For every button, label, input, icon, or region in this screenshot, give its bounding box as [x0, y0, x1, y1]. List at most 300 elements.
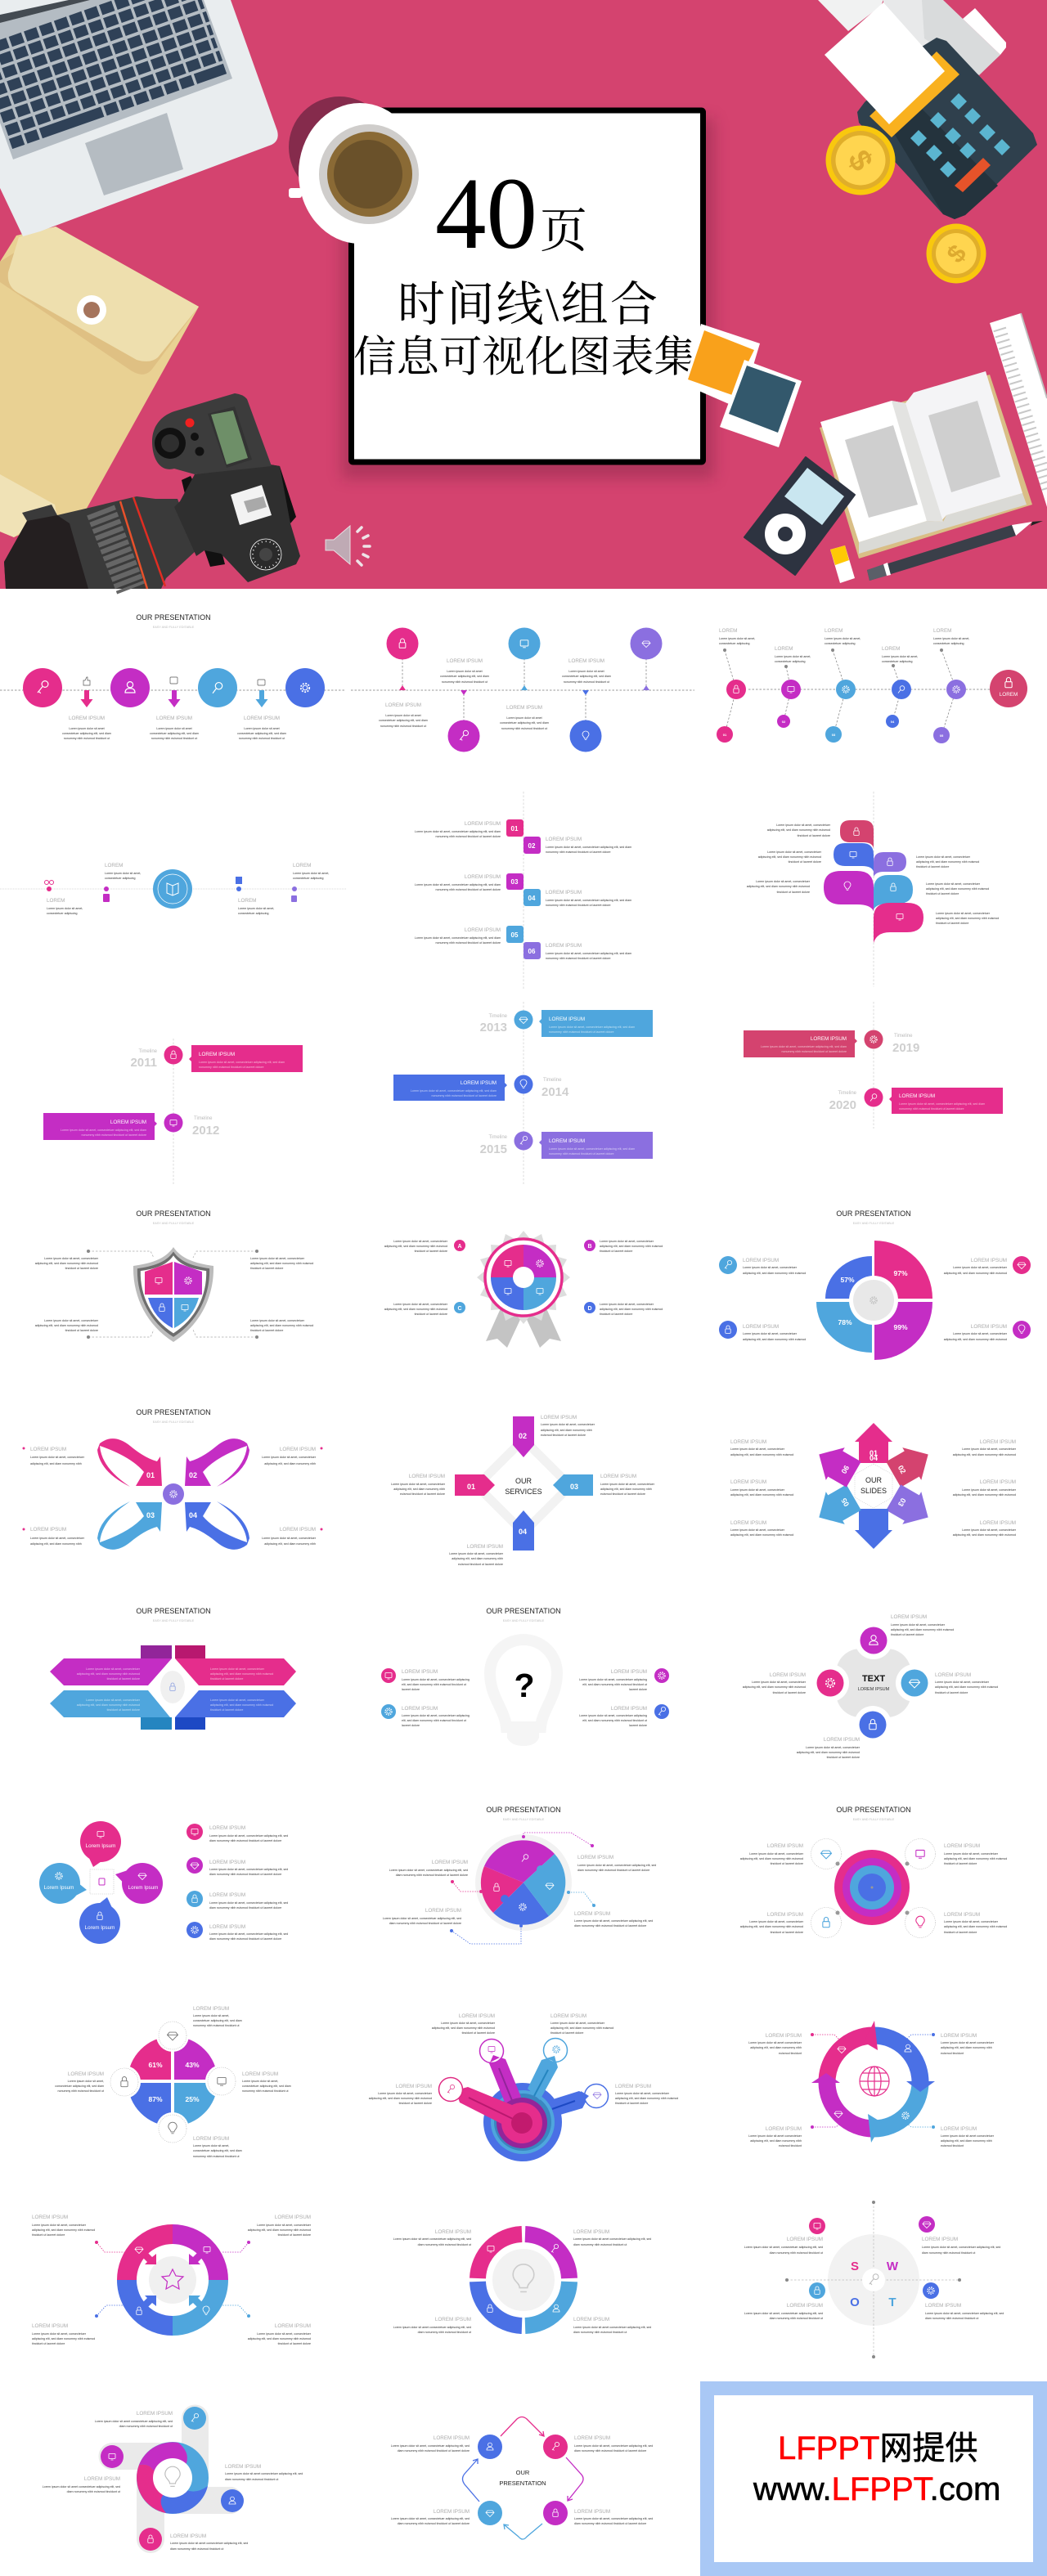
- text D: adipiscing elit, sed diam nonummy nibh euismod: [747, 885, 810, 888]
- text TR: Lorem ipsum dolor sit amet consectetuer adipiscing elit, sed: [573, 2237, 651, 2241]
- text A: adipiscing elit, sed diam nonummy nibh euismod: [384, 1245, 447, 1248]
- text BR: LOREM IPSUM: [574, 2509, 610, 2515]
- gold coins: $: [841, 145, 879, 177]
- text TR: LOREM IPSUM: [573, 2229, 609, 2235]
- slide: timeline 2013-2015: [393, 1002, 653, 1186]
- box 2012: LOREM IPSUM: [110, 1120, 146, 1125]
- petal 01: [97, 1438, 162, 1487]
- text 5: LOREM: [933, 628, 951, 634]
- text blue: adipiscing elit, sed diam nonummy nibh euismod: [615, 2097, 678, 2100]
- text left 1: LOREM IPSUM: [402, 1669, 438, 1675]
- text left top: diam nonummy nibh euismod tincidunt ut laoreet dolore: [396, 1874, 468, 1877]
- small icons: [44, 877, 297, 902]
- bubble purple: Lorem Ipsum: [128, 1885, 158, 1891]
- tabs: D: [587, 1306, 592, 1312]
- text 4: consectetuer adipiscing: [238, 912, 269, 915]
- text 2: Lorem ipsum dolor sit amet: [156, 727, 192, 730]
- text BR: LOREM IPSUM: [944, 1912, 980, 1918]
- SWOT letters: [850, 2260, 899, 2309]
- subheading: EASY AND FULLY EDITABLE: [853, 1818, 895, 1821]
- bubble pink: Lorem Ipsum: [86, 1843, 115, 1849]
- pencil: [867, 521, 1043, 581]
- node pink: [543, 2435, 568, 2459]
- box 2011: LOREM IPSUM: [199, 1052, 235, 1057]
- numbers: 03: [146, 1511, 155, 1519]
- box 2012: nonummy nibh euismod tincidunt ut laoreet dolore: [81, 1133, 146, 1137]
- text upper 1: consectetuer adipiscing elit, sed diam: [440, 675, 489, 678]
- text T: diam nonummy nibh euismod tincidunt ut: [925, 2317, 978, 2320]
- box 2012: Lorem ipsum dolor sit amet, consectetuer adipiscing elit, sed diam: [61, 1129, 146, 1132]
- node top: [183, 2407, 206, 2430]
- text 1: consectetuer adipiscing: [105, 877, 136, 880]
- values: [148, 2061, 200, 2103]
- year 2011: Timeline: [139, 1049, 158, 1054]
- inward arrow blue: [140, 2296, 156, 2310]
- box 2013: LOREM IPSUM: [549, 1016, 585, 1022]
- heading: OUR PRESENTATION: [836, 1209, 911, 1218]
- text left: Lorem ipsum dolor sit amet,: [68, 2080, 104, 2083]
- text 3: Lorem ipsum dolor sit amet: [244, 727, 280, 730]
- node 2011: [164, 1045, 183, 1065]
- text 06: LOREM IPSUM: [546, 943, 582, 949]
- text B: Lorem ipsum dolor sit amet, consectetuer: [767, 850, 822, 854]
- text 02: LOREM IPSUM: [541, 1415, 577, 1420]
- text 03: Lorem ipsum dolor sit amet, consectetuer: [600, 1483, 655, 1486]
- box 2020: nonummy nibh euismod tincidunt ut laoreet dolore: [899, 1107, 964, 1111]
- text BL: Lorem ipsum dolor sit amet consectetuer: [748, 2134, 802, 2138]
- values: 87%: [148, 2095, 163, 2103]
- connectors: [97, 2242, 249, 2316]
- box 2014: [393, 1075, 507, 1101]
- bubble D: [824, 871, 874, 911]
- slide: four quadrant percentages: [55, 2006, 291, 2158]
- slide: four node cycle: [391, 2417, 653, 2539]
- text 1: LOREM IPSUM: [69, 716, 105, 721]
- text bottom: diam nonummy nibh euismod tincidunt ut: [170, 2547, 223, 2551]
- watermark line 2: www.LFPPT.com: [753, 2471, 1000, 2507]
- subheading: EASY AND FULLY EDITABLE: [503, 1619, 545, 1622]
- text 2: LOREM: [293, 863, 311, 868]
- text BL: LOREM IPSUM: [435, 2317, 471, 2322]
- left text 2: Lorem ipsum dolor sit amet, consectetuer: [730, 1488, 785, 1492]
- text T: Lorem ipsum dolor sit amet, consectetuer adipiscing elit, sed: [925, 2312, 1004, 2315]
- tag 02: 02: [519, 1432, 527, 1440]
- text right bottom: LOREM IPSUM: [574, 1911, 610, 1917]
- slide: target with arrows: [369, 2013, 678, 2161]
- center marker: [90, 1869, 114, 1894]
- box 2015: LOREM IPSUM: [549, 1138, 585, 1144]
- subheading: EASY AND FULLY EDITABLE: [503, 1818, 545, 1821]
- text 3: LOREM: [47, 898, 65, 904]
- box 2020: LOREM IPSUM: [899, 1093, 935, 1099]
- hero title: 40页: 40: [435, 158, 537, 271]
- list text 4: diam nonummy nibh euismod tincidunt ut laoreet dolore: [209, 1937, 281, 1941]
- text lower 2: LOREM IPSUM: [506, 705, 542, 711]
- panel inner: [714, 2395, 1033, 2562]
- text right: adipiscing elit, sed diam nonummy nibh euismod: [935, 1685, 998, 1689]
- text 04: LOREM IPSUM: [280, 1527, 316, 1533]
- gray hub: [836, 1649, 911, 1717]
- text BR: diam nonummy nibh euismod tincidunt ut: [573, 2331, 627, 2334]
- slide: light bulb question: [381, 1607, 669, 1746]
- head light blue: [543, 2038, 568, 2062]
- text BL: Lorem ipsum dolor sit amet, consectetuer: [44, 1319, 99, 1322]
- text 2: LOREM IPSUM: [156, 716, 192, 721]
- left text 2: adipiscing elit, sed diam nonummy nibh euismod: [730, 1493, 793, 1497]
- node 2015: [514, 1132, 533, 1150]
- text 01: adipiscing elit, sed diam nonummy nibh: [30, 1462, 82, 1465]
- concentric rings: [834, 1850, 910, 1925]
- axis: [523, 792, 524, 990]
- box 2013: nonummy nibh euismod tincidunt ut laoreet dolore: [549, 1030, 614, 1034]
- list text 1: Lorem ipsum dolor sit amet, consectetuer adipiscing elit, sed: [209, 1834, 288, 1838]
- text TL: euismod tincidunt: [779, 2052, 802, 2055]
- node bottom: [859, 1711, 887, 1739]
- text A: tincidunt ut laoreet dolore: [415, 1250, 447, 1253]
- arrow 04: [855, 1454, 892, 1549]
- text lower 1: consectetuer adipiscing elit, sed diam: [379, 719, 428, 722]
- text right: LOREM IPSUM: [935, 1672, 971, 1678]
- right text 2: adipiscing elit, sed diam nonummy nibh euismod: [953, 1493, 1016, 1497]
- pie values: 99%: [893, 1323, 908, 1331]
- slide: shield: [35, 1209, 313, 1342]
- text 03: adipiscing elit, sed diam nonummy nibh: [30, 1542, 82, 1546]
- dashed icon right: [205, 2065, 238, 2098]
- number nodes: [717, 715, 950, 743]
- slide: circles timeline: [0, 613, 346, 740]
- text 78%: adipiscing elit, sed diam nonummy nibh euismod: [743, 1338, 806, 1341]
- text S: LOREM IPSUM: [787, 2237, 823, 2242]
- axis: [173, 1039, 174, 1186]
- arrow 3: [255, 690, 268, 707]
- cross axes: [787, 2202, 959, 2357]
- text TL: tincidunt ut laoreet dolore: [65, 1267, 98, 1270]
- text TL: adipiscing elit, sed diam nonummy nibh euismod: [32, 2228, 95, 2232]
- text right 2: elit, sed diam nonummy nibh euismod tincidunt ut: [582, 1719, 647, 1722]
- text left: LOREM IPSUM: [84, 2476, 120, 2482]
- ribbon text: Lorem ipsum dolor sit amet, consectetuer: [210, 1699, 265, 1702]
- text left bottom: Lorem ipsum dolor sit amet, consectetuer adipiscing elit, sed: [383, 1917, 461, 1920]
- left text 3: LOREM IPSUM: [730, 1520, 766, 1526]
- text right: LOREM IPSUM: [242, 2071, 278, 2077]
- text bottom: consectetuer adipiscing elit, sed diam: [193, 2149, 242, 2152]
- list text 4: Lorem ipsum dolor sit amet, consectetuer adipiscing elit, sed: [209, 1932, 288, 1936]
- text 06: Lorem ipsum dolor sit amet, consectetuer adipiscing elit, sed diam: [546, 952, 631, 955]
- text right bottom: Lorem ipsum dolor sit amet, consectetuer adipiscing elit, sed: [574, 1919, 653, 1923]
- text 02: adipiscing elit, sed diam nonummy nibh: [541, 1429, 592, 1432]
- text BR: adipiscing elit, sed diam nonummy nibh euismod: [248, 2337, 311, 2340]
- text 01: Lorem ipsum dolor sit amet, consectetuer adipiscing elit, sed diam: [415, 830, 501, 833]
- tags 01-06: 06: [528, 948, 536, 955]
- node 2012: [164, 1114, 183, 1132]
- connector dots: [87, 1250, 258, 1339]
- text TR: diam nonummy nibh euismod tincidunt ut: [573, 2243, 627, 2246]
- ribbon text: [77, 1667, 273, 1712]
- tag 01: 01: [467, 1483, 475, 1491]
- text BL: diam nonummy nibh euismod tincidunt ut: [418, 2331, 471, 2334]
- year 2015: Timeline: [489, 1135, 508, 1140]
- text BL: tincidunt ut laoreet dolore: [771, 1931, 803, 1934]
- axis: [873, 1002, 874, 1129]
- axis: [0, 888, 346, 890]
- text 01: adipiscing elit, sed diam nonummy nibh: [393, 1488, 445, 1491]
- slide: puzzle circle: [383, 1806, 656, 1944]
- text C: adipiscing elit, sed diam nonummy nibh euismod: [384, 1308, 447, 1311]
- subheading: EASY AND FULLY EDITABLE: [153, 1222, 195, 1225]
- text TR: Lorem ipsum dolor sit amet, consectetuer adipiscing elit, sed: [574, 2444, 653, 2448]
- node 3: [198, 668, 237, 707]
- pin 2: [509, 628, 540, 690]
- hero background: [0, 0, 1047, 589]
- text 02: nonummy nibh euismod tincidunt ut laoreet dolore: [546, 850, 611, 854]
- list text 1: diam nonummy nibh euismod tincidunt ut laoreet dolore: [209, 1839, 281, 1842]
- text 04: adipiscing elit, sed diam nonummy nibh: [452, 1557, 503, 1560]
- ribbon text: tincidunt ut laoreet dolore: [107, 1708, 140, 1712]
- text 04: adipiscing elit, sed diam nonummy nibh: [264, 1542, 316, 1546]
- box 2019: [744, 1030, 857, 1057]
- text right: Lorem ipsum dolor sit amet,: [242, 2080, 278, 2083]
- text 1: consectetuer adipiscing: [719, 642, 750, 645]
- quadrants: [128, 2036, 218, 2126]
- center text: LOREM IPSUM: [858, 1687, 890, 1692]
- inward arrow pink: [140, 2250, 156, 2264]
- text upper 2: consectetuer adipiscing elit, sed diam: [562, 675, 611, 678]
- text 06: nonummy nibh euismod tincidunt ut laoreet dolore: [546, 957, 611, 960]
- text left: adipiscing elit, sed diam nonummy nibh euismod: [743, 1685, 806, 1689]
- text top: LOREM IPSUM: [891, 1614, 927, 1620]
- bubble A: [840, 820, 874, 848]
- text top: LOREM IPSUM: [193, 2006, 229, 2012]
- slide: text hub: [743, 1614, 998, 1759]
- text 97%: adipiscing elit, sed diam nonummy nibh euismod: [944, 1272, 1007, 1275]
- list icons: [186, 1824, 203, 1938]
- head purple: [479, 2040, 504, 2062]
- text TR: tincidunt ut laoreet dolore: [250, 1267, 283, 1270]
- year 2019: 2019: [892, 1041, 919, 1055]
- icons: [719, 1256, 1031, 1339]
- core: [511, 2112, 532, 2134]
- text 4: consectetuer adipiscing: [882, 660, 913, 663]
- text right top: LOREM IPSUM: [577, 1855, 613, 1860]
- text 3: consectetuer adipiscing elit, sed diam: [237, 732, 286, 735]
- text BR: tincidunt ut laoreet dolore: [944, 1931, 977, 1934]
- box 2013: Lorem ipsum dolor sit amet, consectetuer adipiscing elit, sed diam: [549, 1025, 635, 1029]
- text TL: Lorem ipsum dolor sit amet consectetuer: [748, 2041, 802, 2044]
- text TR: diam nonummy nibh euismod tincidunt ut laoreet dolore: [574, 2449, 646, 2453]
- text BL: Lorem ipsum dolor sit amet, consectetuer adipiscing elit, sed: [391, 2517, 470, 2520]
- slide: badge: [384, 1231, 663, 1348]
- ribbon folds: [141, 1645, 205, 1730]
- white cutouts: [811, 1622, 933, 1744]
- text upper 2: LOREM IPSUM: [568, 658, 604, 664]
- tags 01-06: 02: [528, 842, 536, 850]
- numbers: [146, 1471, 197, 1519]
- text lower 2: Lorem ipsum dolor sit amet: [506, 716, 542, 720]
- star: [162, 2269, 183, 2289]
- text BL: LOREM IPSUM: [767, 1912, 803, 1918]
- slide: concentric target: [740, 1806, 1007, 1938]
- bubble F: [874, 903, 923, 943]
- text top: consectetuer adipiscing elit, sed diam: [193, 2019, 242, 2022]
- text 01: Lorem ipsum dolor sit amet, consectetuer: [391, 1483, 446, 1486]
- icons: [381, 1668, 669, 1719]
- text blue: tincidunt ut laoreet dolore: [615, 2102, 648, 2105]
- heading: OUR PRESENTATION: [136, 1408, 211, 1416]
- text left 2: elit, sed diam nonummy nibh euismod tincidunt ut: [402, 1719, 466, 1722]
- year 2011: 2011: [130, 1056, 157, 1070]
- small icons: [83, 677, 265, 685]
- diamond frame: [477, 1439, 570, 1533]
- text TL: LOREM IPSUM: [434, 2435, 470, 2441]
- text top: tincidunt ut laoreet dolore: [891, 1633, 923, 1636]
- text S: Lorem ipsum dolor sit amet, consectetuer adipiscing elit, sed: [744, 2246, 823, 2249]
- text TR: LOREM IPSUM: [944, 1843, 980, 1849]
- box 2015: nonummy nibh euismod tincidunt ut laoreet dolore: [549, 1152, 614, 1156]
- text 04: Lorem ipsum dolor sit amet, consectetuer: [449, 1552, 504, 1555]
- center circle: [862, 2269, 885, 2291]
- text TL: diam nonummy nibh euismod tincidunt ut: [418, 2243, 471, 2246]
- text BL: Lorem ipsum dolor sit amet consectetuer adipiscing elit, sed: [393, 2326, 471, 2329]
- text 3: LOREM IPSUM: [244, 716, 280, 721]
- node top: [861, 1627, 887, 1654]
- text TL: diam nonummy nibh euismod tincidunt ut laoreet dolore: [398, 2449, 470, 2453]
- arrow heads: [811, 2021, 935, 2143]
- text B: adipiscing elit, sed diam nonummy nibh euismod: [600, 1245, 663, 1248]
- text TR: Lorem ipsum dolor sit amet, consectetuer: [250, 1257, 305, 1260]
- text 97%: Lorem ipsum dolor sit amet, consectetuer: [953, 1266, 1008, 1269]
- text 02: adipiscing elit, sed diam nonummy nibh: [264, 1462, 316, 1465]
- tag 02: [513, 1416, 534, 1457]
- tabs: C: [457, 1306, 462, 1312]
- bullets: [23, 1447, 322, 1531]
- tag 03: 03: [570, 1483, 578, 1491]
- laptop: [0, 0, 278, 236]
- text TR: adipiscing elit, sed diam nonummy nibh: [941, 2046, 992, 2049]
- text pink: tincidunt ut laoreet dolore: [399, 2102, 432, 2105]
- arrow 2: [169, 690, 180, 707]
- text 99%: LOREM IPSUM: [971, 1324, 1007, 1330]
- ribbon text: Lorem ipsum dolor sit amet, consectetuer: [86, 1699, 141, 1702]
- text left 2: LOREM IPSUM: [402, 1706, 438, 1712]
- numbers: 04: [189, 1511, 197, 1519]
- text 02: LOREM IPSUM: [546, 837, 582, 842]
- text E: tincidunt ut laoreet dolore: [926, 892, 959, 895]
- box 2011: [189, 1045, 303, 1072]
- node 2013: [514, 1011, 533, 1029]
- text BR: adipiscing elit, sed diam nonummy nibh: [941, 2139, 992, 2143]
- text TL: adipiscing elit, sed diam nonummy nibh euismod: [35, 1262, 98, 1265]
- text BL: adipiscing elit, sed diam nonummy nibh euismod: [35, 1324, 98, 1327]
- ribbon text: Lorem ipsum dolor sit amet, consectetuer: [86, 1667, 141, 1671]
- ribbon text: tincidunt ut laoreet dolore: [210, 1677, 243, 1681]
- text BR: diam nonummy nibh euismod tincidunt ut laoreet dolore: [574, 2522, 646, 2525]
- text right: tincidunt ut laoreet dolore: [935, 1691, 968, 1694]
- text TL: LOREM IPSUM: [767, 1843, 803, 1849]
- central book node: [153, 869, 192, 909]
- puzzle pieces: [481, 1840, 565, 1925]
- SWOT letters: S: [851, 2260, 859, 2273]
- text BR: adipiscing elit, sed diam nonummy nibh euismod: [944, 1925, 1007, 1928]
- text 04: Lorem ipsum dolor sit amet, consectetuer adipiscing elit, sed diam: [546, 899, 631, 902]
- text 01: Lorem ipsum dolor sit amet, consectetuer: [30, 1456, 85, 1459]
- bubble E: [874, 875, 913, 909]
- text TR: adipiscing elit, sed diam nonummy nibh euismod: [944, 1857, 1007, 1860]
- text TL: LOREM IPSUM: [435, 2229, 471, 2235]
- text TR: adipiscing elit, sed diam nonummy nibh euismod: [250, 1262, 313, 1265]
- text 1: Lorem ipsum dolor sit amet,: [105, 872, 141, 875]
- shield quadrants: [145, 1262, 202, 1328]
- heading: OUR PRESENTATION: [136, 1607, 211, 1615]
- petal 02: [185, 1438, 249, 1487]
- ribbon purple: [50, 1658, 172, 1685]
- text left 2: laoreet dolore: [402, 1724, 420, 1727]
- text 01: LOREM IPSUM: [30, 1447, 66, 1452]
- envelope: [0, 227, 199, 537]
- text TR: LOREM IPSUM: [275, 2215, 311, 2220]
- text left: tincidunt ut laoreet dolore: [773, 1691, 806, 1694]
- bubble light blue: Lorem Ipsum: [44, 1885, 74, 1891]
- text 1: Lorem ipsum dolor sit amet: [69, 727, 105, 730]
- text BR: Lorem ipsum dolor sit amet, consectetuer adipiscing elit, sed: [574, 2517, 653, 2520]
- tabs: B: [587, 1244, 592, 1250]
- node 1: [23, 668, 62, 707]
- values: 43%: [185, 2061, 200, 2069]
- slide: book timeline: [0, 863, 346, 915]
- year 2019: Timeline: [894, 1034, 913, 1039]
- text purple: Lorem ipsum dolor sit amet, consectetuer: [441, 2022, 496, 2025]
- text 78%: LOREM IPSUM: [743, 1324, 779, 1330]
- pin 4: [448, 690, 479, 752]
- text right 2: laoreet dolore: [629, 1724, 647, 1727]
- text left 1: Lorem ipsum dolor sit amet, consectetuer adipiscing: [402, 1678, 470, 1681]
- text light blue: Lorem ipsum dolor sit amet, consectetuer: [550, 2022, 605, 2025]
- text top: nonummy nibh euismod tincidunt ut: [193, 2024, 240, 2027]
- text 99%: Lorem ipsum dolor sit amet, consectetuer: [953, 1332, 1008, 1335]
- text upper 1: Lorem ipsum dolor sit amet: [447, 670, 483, 673]
- text lower 1: nonummy nibh euismod tincidunt ut: [380, 725, 426, 728]
- text F: adipiscing elit, sed diam nonummy nibh euismod: [936, 917, 999, 920]
- slide: hexagon ribbons: [50, 1607, 296, 1730]
- text 57%: LOREM IPSUM: [743, 1258, 779, 1263]
- end node: [990, 670, 1027, 707]
- text C: adipiscing elit, sed diam nonummy nibh euismod: [916, 860, 979, 864]
- node blue: [478, 2435, 502, 2459]
- year 2012: 2012: [192, 1124, 219, 1138]
- icons: [809, 2216, 939, 2299]
- axis and stems: [351, 644, 694, 736]
- text 57%: Lorem ipsum dolor sit amet, consectetuer: [743, 1266, 798, 1269]
- text pink: adipiscing elit, sed diam nonummy nibh euismod: [369, 2097, 432, 2100]
- slide: our slides hexagon arrows: [730, 1423, 1017, 1549]
- box 2019: nonummy nibh euismod tincidunt ut laoreet dolore: [781, 1050, 847, 1053]
- text BR: LOREM IPSUM: [941, 2126, 977, 2132]
- text BR: Lorem ipsum dolor sit amet consectetuer adipiscing elit, sed: [573, 2326, 651, 2329]
- printer paper and calculator: [818, 0, 1037, 219]
- axis and stems: [725, 650, 990, 735]
- text A: Lorem ipsum dolor sit amet, consectetuer: [393, 1240, 448, 1243]
- values: 61%: [148, 2061, 163, 2069]
- ribbon pink: [175, 1658, 296, 1685]
- gear rosette: [477, 1231, 570, 1324]
- left text 3: Lorem ipsum dolor sit amet, consectetuer: [730, 1528, 785, 1532]
- arrow 02: [884, 1438, 937, 1491]
- dashed node TR: [905, 1838, 936, 1869]
- text 1: consectetuer adipiscing elit, sed diam: [62, 732, 111, 735]
- text BL: adipiscing elit, sed diam nonummy nibh euismod: [32, 2337, 95, 2340]
- slide: numbered tags timeline: [415, 792, 631, 990]
- year 2015: 2015: [480, 1142, 507, 1156]
- text bottom: LOREM IPSUM: [193, 2136, 229, 2142]
